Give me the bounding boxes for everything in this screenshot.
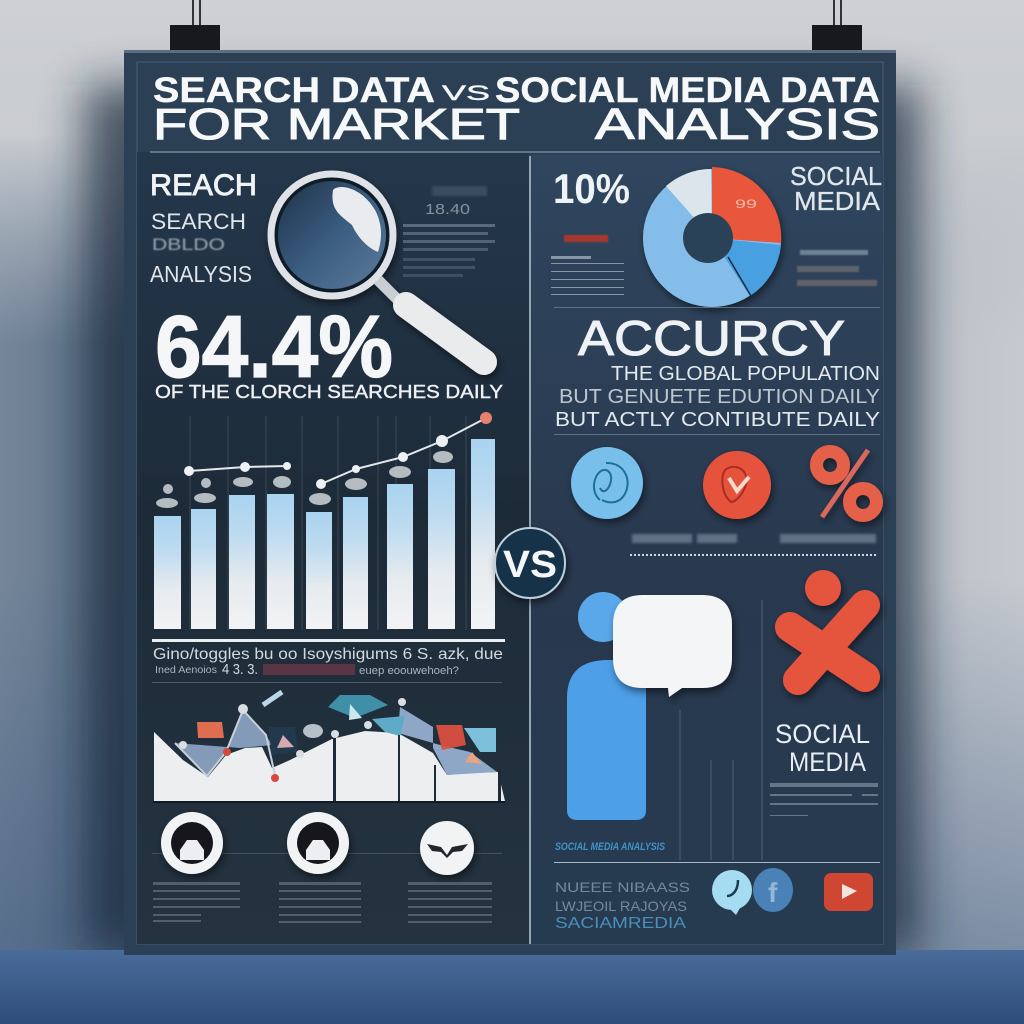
vs badge bbox=[495, 528, 565, 598]
chart note: euep eoouwehoeh? bbox=[359, 665, 459, 677]
blurred caption bbox=[632, 534, 876, 543]
icon: red person cross bbox=[790, 570, 865, 680]
social media note bbox=[770, 783, 878, 816]
chart note: Gino/toggles bu oo Isoyshigums 6 S. azk, due bbox=[153, 646, 503, 663]
icon: phone bubble bbox=[712, 870, 752, 915]
icon: circle two bbox=[287, 812, 349, 874]
small stat and note: 18.40 bbox=[425, 201, 470, 218]
footer text: SACIAMREDIA bbox=[555, 915, 686, 932]
floor bbox=[0, 950, 1024, 1024]
legend right bbox=[797, 250, 877, 286]
chart note: Ined Aenoios bbox=[155, 665, 217, 676]
title: SEARCH DATA bbox=[153, 71, 435, 110]
search sub-heading: ANALYSIS bbox=[150, 261, 252, 287]
donut label: 99 bbox=[735, 197, 758, 211]
footer text bbox=[555, 879, 690, 932]
poster bbox=[124, 50, 896, 955]
thin grid lines bbox=[680, 600, 762, 860]
hanging clip: right bbox=[812, 0, 862, 51]
footer text: LWJEOIL RAJOYAS bbox=[555, 898, 687, 914]
search sub-heading: DBLDO bbox=[152, 235, 225, 254]
accuracy description bbox=[555, 363, 880, 431]
chart note bbox=[152, 639, 505, 683]
accuracy description: THE GLOBAL POPULATION bbox=[611, 363, 880, 385]
title bbox=[153, 71, 880, 149]
social media heading bbox=[790, 161, 882, 216]
panel: social media bbox=[531, 155, 883, 944]
social media label bbox=[775, 719, 870, 777]
icon: percent bbox=[816, 450, 876, 517]
area chart bbox=[153, 692, 505, 803]
title: FOR MARKET bbox=[153, 100, 520, 149]
title: ANALYSIS bbox=[595, 100, 880, 149]
social media label: MEDIA bbox=[789, 747, 866, 777]
social media heading: MEDIA bbox=[794, 186, 881, 216]
stat: 10%: 10% bbox=[553, 165, 630, 212]
icon row: search bbox=[152, 812, 502, 875]
icon: magnifying glass bbox=[271, 174, 484, 362]
icon: red check circle bbox=[703, 451, 771, 519]
accuracy description: BUT GENUETE EDUTION DAILY bbox=[559, 386, 880, 408]
title: SOCIAL MEDIA DATA bbox=[495, 71, 880, 110]
icon: circle three bbox=[420, 821, 474, 875]
reach heading: REACH bbox=[150, 169, 257, 202]
vs badge: VS bbox=[503, 544, 557, 586]
icon captions bbox=[153, 882, 492, 923]
separators bbox=[554, 307, 880, 435]
social media label: SOCIAL bbox=[775, 719, 870, 749]
icon: blue circle bbox=[571, 447, 643, 519]
accuracy description: BUT ACTLY CONTIBUTE DAILY bbox=[555, 409, 880, 431]
hanging clip: left bbox=[170, 0, 220, 51]
search sub-heading bbox=[150, 209, 252, 287]
small stat and note bbox=[403, 186, 495, 277]
chart note: 4 3. 3. bbox=[222, 661, 258, 678]
donut chart bbox=[643, 167, 781, 307]
search sub-heading: SEARCH bbox=[151, 209, 246, 234]
footer text: NUEEE NIBAASS bbox=[555, 879, 690, 895]
big stat: 64.4% bbox=[155, 297, 393, 396]
stat caption: OF THE CLORCH SEARCHES DAILY bbox=[155, 382, 503, 402]
blue tagline: SOCIAL MEDIA ANALYSIS bbox=[555, 841, 666, 853]
icon: facebook: f bbox=[768, 877, 778, 908]
panel: search data bbox=[137, 152, 529, 944]
social media heading: SOCIAL bbox=[790, 161, 882, 191]
legend left bbox=[551, 235, 624, 295]
title: VS bbox=[442, 82, 490, 105]
dotted divider bbox=[630, 554, 876, 556]
icon: video bbox=[824, 873, 873, 911]
icon: facebook bbox=[753, 868, 793, 912]
accuracy heading: ACCURCY bbox=[578, 312, 845, 366]
icon: person with speech bubble bbox=[567, 592, 732, 820]
icon: circle one bbox=[161, 812, 223, 874]
bar chart bbox=[154, 412, 495, 630]
center divider bbox=[529, 156, 531, 944]
